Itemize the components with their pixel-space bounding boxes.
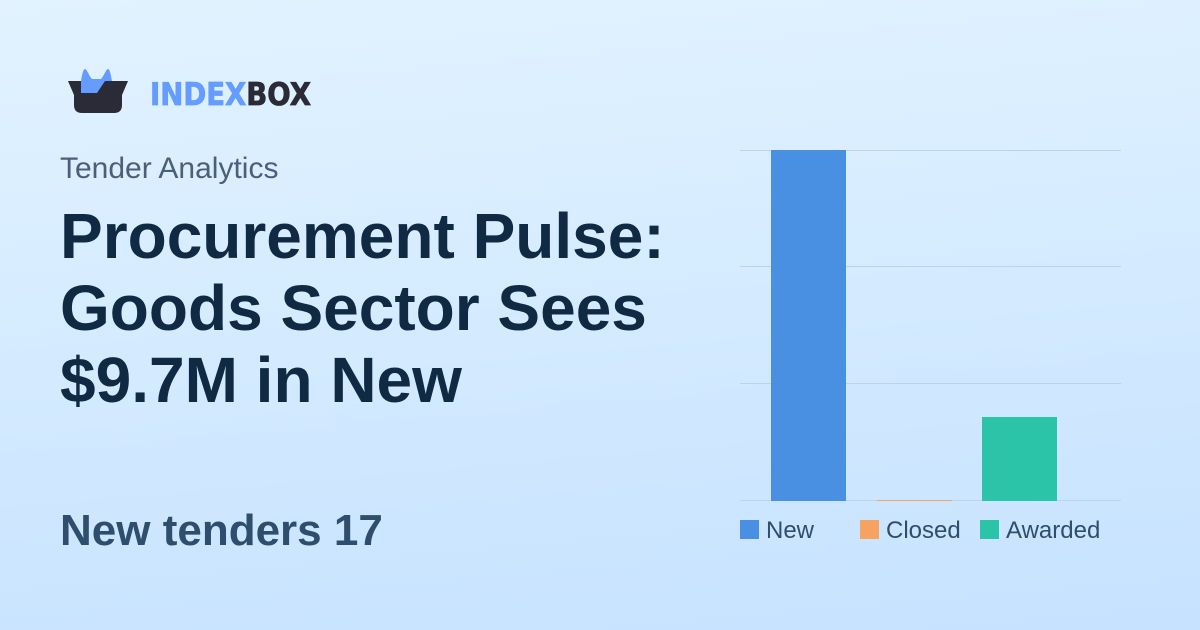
title <box>60 200 665 416</box>
bar: Awarded <box>982 417 1057 501</box>
bar: Closed <box>877 500 952 501</box>
legend: Closed: Closed <box>886 517 961 544</box>
legend: New: New <box>766 517 814 544</box>
bar: New <box>771 150 846 501</box>
logo <box>68 69 311 113</box>
logo wordmark: INDEXBOX <box>150 77 311 113</box>
key metric: New tenders 17 <box>60 506 383 555</box>
legend <box>740 517 1100 544</box>
legend: Awarded: Awarded <box>1006 517 1100 544</box>
subtitle: Tender Analytics <box>60 152 278 185</box>
title: Goods Sector Sees <box>60 272 647 344</box>
legend: New <box>740 517 814 544</box>
bar chart <box>740 150 1121 501</box>
title: Procurement Pulse: <box>60 200 665 272</box>
title: $9.7M in New <box>60 344 462 416</box>
icon: box with cat ears <box>68 69 128 113</box>
